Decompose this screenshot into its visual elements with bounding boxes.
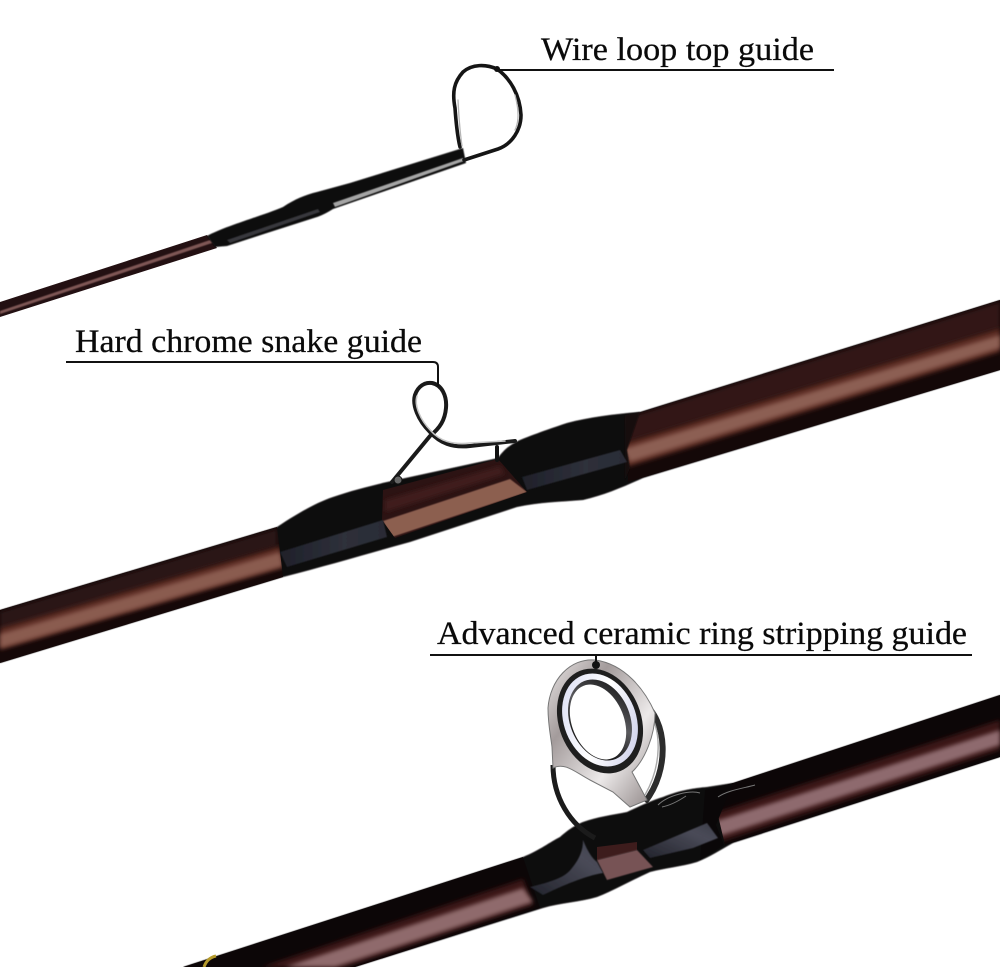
wrap gloss: right [643, 823, 718, 858]
icon: wire loop top guide [454, 66, 521, 160]
thread wrap: right black cap [700, 783, 733, 860]
wrap highlight: thin section [333, 158, 464, 207]
wrap gloss: right [522, 450, 627, 490]
leader line [497, 69, 834, 71]
rod blank: thin maroon tip [0, 235, 217, 317]
thread wrap: right black edge [625, 412, 640, 480]
ring hole [559, 676, 637, 768]
wrap gloss: left [280, 520, 387, 567]
inner dark ring [556, 670, 644, 770]
label: Advanced ceramic ring stripping guide [430, 616, 972, 669]
rod blank: right brown section [626, 300, 1000, 478]
rod silhouette [0, 300, 1000, 663]
icon: ceramic ring stripping guide [542, 656, 663, 838]
thread wrap: bulged black section [207, 148, 466, 247]
label: Wire loop top guide [494, 32, 834, 72]
ceramic ring [549, 662, 651, 778]
rod blank: left section [180, 850, 545, 967]
rod section 2: middle rod with snake guide [0, 290, 1000, 670]
decorative yellow ring [204, 956, 216, 967]
rod section 3: bottom rod with ceramic stripping guide [180, 656, 1000, 967]
leader line [66, 362, 438, 386]
wrap gloss: left [530, 840, 603, 895]
label: Hard chrome snake guide [66, 324, 438, 386]
label: Hard chrome snake guide: Hard chrome snake guide [75, 324, 422, 360]
rod section 1: top rod tip with wire loop guide [0, 66, 521, 320]
rod blank: middle brown section [382, 460, 527, 538]
mid maroon band [597, 842, 637, 860]
rod blank: right section [718, 695, 1000, 844]
wrap highlight: lower bulge [227, 209, 320, 243]
icon: hard chrome snake guide [392, 383, 515, 484]
guide legs [553, 765, 595, 838]
label: Wire loop top guide: Wire loop top guide [541, 32, 814, 68]
leader line [430, 655, 972, 664]
ring holder black [542, 656, 658, 786]
wrap swirl reflections [658, 785, 755, 807]
silver frame [548, 660, 655, 807]
mid brown band [597, 850, 653, 880]
rod silhouette [183, 695, 1000, 967]
rod blank: left brown section [0, 527, 283, 663]
label: Advanced ceramic ring stripping guide: Advanced ceramic ring stripping guide [437, 616, 967, 652]
